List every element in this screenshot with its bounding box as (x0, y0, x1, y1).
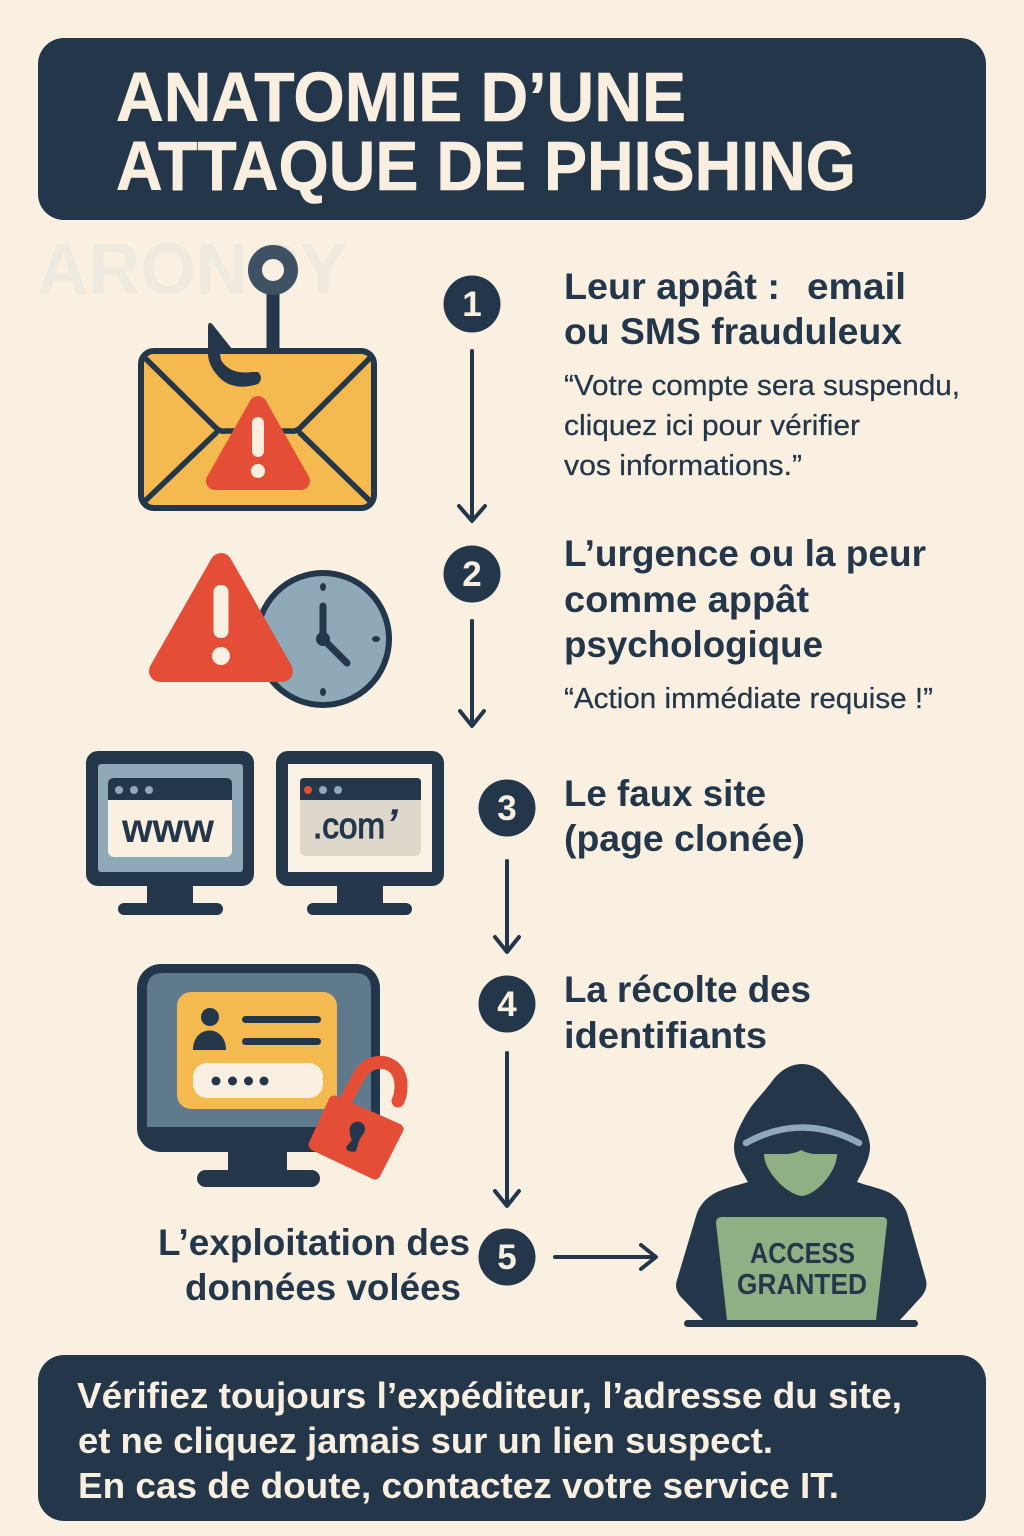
step 1 text: ou SMS frauduleux (564, 311, 902, 352)
step 1 number: 1 (462, 285, 482, 324)
step 4 number (478, 976, 536, 1032)
icon: hacker with laptop (676, 1064, 926, 1327)
icon: warning triangle and clock (160, 564, 389, 705)
warning triangle (160, 564, 282, 671)
step 5 text (158, 1222, 470, 1308)
title banner (38, 38, 986, 220)
icon: fake site monitor (276, 751, 444, 915)
step 5 text: données volées (185, 1267, 461, 1308)
step 5 text: L’exploitation des (158, 1222, 470, 1263)
footer advice text: et ne cliquez jamais sur un lien suspect. (78, 1420, 773, 1461)
icon: envelope with fishing hook and warning (141, 252, 374, 508)
step 1 text (564, 266, 960, 482)
watermark: ARONCY (37, 230, 347, 310)
step 3 text: Le faux site (564, 773, 766, 814)
login card (177, 992, 337, 1109)
step 2 text (564, 533, 933, 715)
icon: fake site monitor: .com (313, 805, 385, 846)
step 1 text: Leur appât : (564, 266, 780, 307)
step 2 text: psychologique (564, 624, 823, 665)
footer advice text: Vérifiez toujours l’expéditeur, l’adresse du site, (77, 1375, 902, 1416)
step 2 text: L’urgence ou la peur (564, 533, 926, 574)
icon: genuine site monitor (86, 751, 254, 915)
step 4 text: La récolte des (564, 969, 811, 1010)
step 5 number (478, 1228, 536, 1286)
step 5 number: 5 (497, 1238, 517, 1277)
clock (257, 573, 389, 705)
open padlock (314, 1062, 401, 1174)
step 2 text: “Action immédiate requise !” (564, 683, 933, 715)
footer advice text: En cas de doute, contactez votre service IT. (78, 1465, 839, 1506)
step 3 text (564, 773, 805, 859)
arrow: step 1 to 2 (459, 351, 485, 521)
arrow: step 5 to hacker (555, 1245, 656, 1269)
arrow: step 3 to 4 (495, 861, 519, 952)
step 4 number: 4 (497, 985, 517, 1024)
step 2 text: comme appât (564, 579, 809, 620)
title text: ATTAQUE DE PHISHING (116, 127, 856, 205)
step 3 number: 3 (497, 789, 517, 828)
icon: genuine site monitor: www (121, 805, 214, 851)
step 1 text: vos informations.” (564, 450, 802, 482)
icon: login monitor with open padlock (137, 964, 401, 1187)
title text: ANATOMIE D’UNE (116, 58, 686, 136)
step 2 number (444, 546, 500, 602)
icon: fake site monitor: ’ (386, 800, 399, 847)
step 4 text: identifiants (564, 1015, 767, 1056)
icon: envelope warning triangle (215, 405, 301, 481)
step 3 text: (page clonée) (564, 818, 805, 859)
footer advice text (77, 1375, 902, 1506)
title text (116, 58, 856, 205)
step 2 number: 2 (462, 555, 482, 594)
step 1 text: email (807, 266, 906, 307)
step 4 text (564, 969, 811, 1056)
step 1 text: cliquez ici pour vérifier (564, 410, 860, 442)
arrow: step 2 to 3 (460, 621, 484, 726)
step 3 number (478, 780, 536, 836)
icon: hook (208, 252, 291, 387)
laptop text: GRANTED (737, 1269, 867, 1301)
step 1 number (444, 276, 500, 332)
arrow: step 4 to 5 (495, 1053, 519, 1206)
step 1 text: “Votre compte sera suspendu, (564, 370, 960, 402)
laptop text: ACCESS (750, 1238, 855, 1270)
laptop text (737, 1238, 867, 1301)
footer banner (38, 1355, 986, 1521)
